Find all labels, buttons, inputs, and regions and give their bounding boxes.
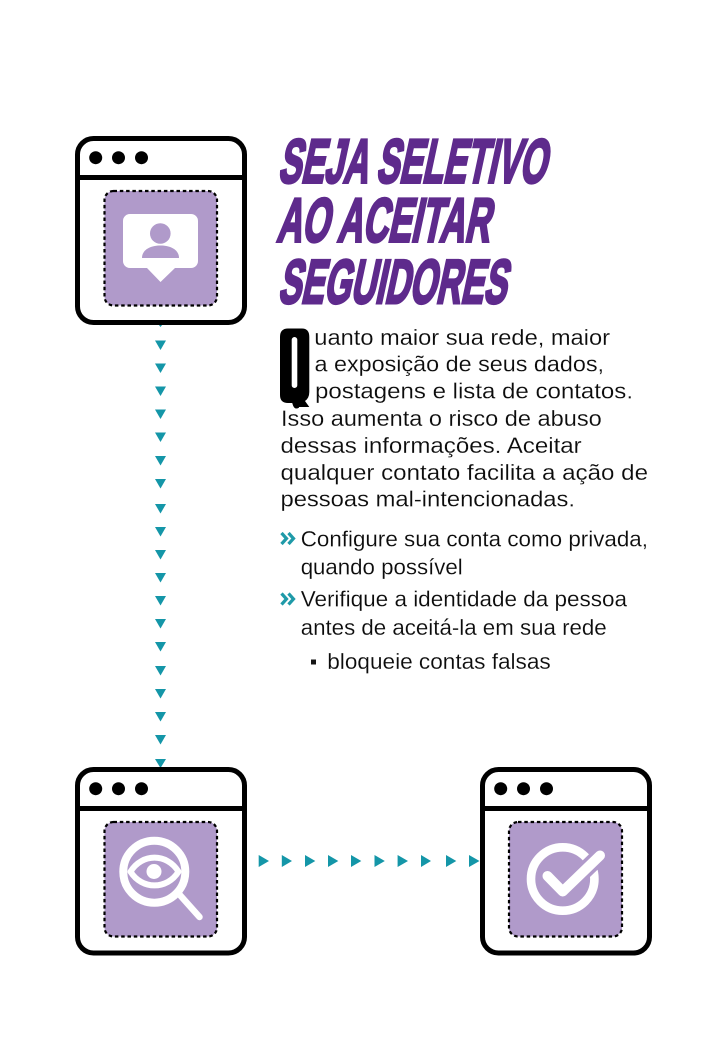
panel: browser window with user profile	[78, 138, 244, 322]
list item 1: quando possível	[301, 554, 463, 579]
title: SEGUIDORES	[275, 248, 517, 317]
list item 2: antes de aceitá-la em sua rede	[301, 615, 607, 640]
horizontal arrow trail	[259, 855, 480, 867]
square bullet	[311, 660, 316, 664]
panel: browser window with eye magnifier	[78, 770, 244, 953]
text block: intro paragraph: a exposição de seus dados,	[314, 352, 604, 377]
drop cap Q: Q	[283, 334, 302, 410]
list item 2	[301, 587, 627, 640]
text block: intro paragraph: postagens e lista de contatos.	[315, 378, 633, 404]
list: recommendations	[282, 526, 648, 674]
title: AO ACEITAR	[273, 186, 501, 255]
icon: chevrons bullet 2	[282, 594, 294, 604]
text block: intro paragraph: uanto maior sua rede, maior	[314, 325, 611, 350]
vertical arrow trail	[155, 320, 166, 768]
title	[273, 127, 557, 317]
sub-item: bloqueie contas falsas	[327, 649, 551, 674]
text block: intro paragraph	[280, 325, 648, 512]
icon: check mark in circle	[531, 847, 600, 911]
icon: profile speech bubble	[123, 214, 198, 282]
drop cap Q	[280, 328, 309, 410]
icon: chevrons bullet 1	[282, 533, 294, 544]
text block: intro paragraph: qualquer contato facilita a ação de	[280, 460, 648, 485]
text block: intro paragraph: pessoas mal-intencionadas.	[280, 486, 575, 512]
list item 1	[301, 526, 648, 579]
text block: intro paragraph: Isso aumenta o risco de abuso	[281, 406, 602, 431]
text block: intro paragraph: dessas informações. Aceitar	[280, 433, 582, 458]
list item 2: Verifique a identidade da pessoa	[301, 587, 627, 612]
list item 1: Configure sua conta como privada,	[301, 526, 648, 552]
icon: eye in magnifying glass	[123, 841, 200, 917]
panel: browser window with check mark	[482, 770, 650, 953]
